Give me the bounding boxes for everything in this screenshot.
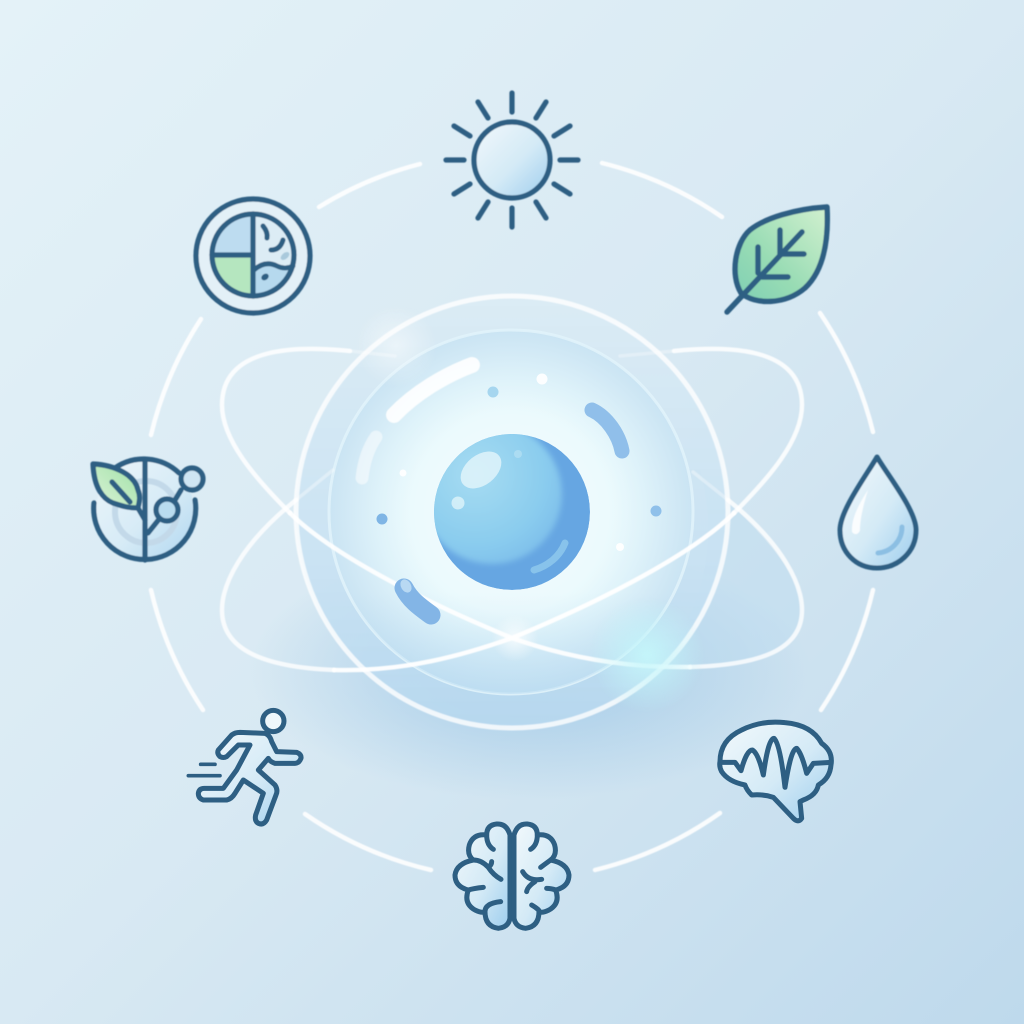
nucleus [434,434,590,590]
icon: sun [446,93,578,227]
icon: brain with wave [720,722,831,821]
organelle: lower left [398,577,431,615]
icon: petri dish [196,199,310,313]
icon: leaf [727,207,827,312]
orbit lines, upper and back [222,349,802,670]
orbit lobe shading [660,470,802,667]
nucleus glow [382,382,642,642]
icon: brain [455,824,569,928]
icon: runner [188,710,301,824]
central cell [222,296,810,800]
orbit lines, front crossing [290,513,734,670]
organelle: upper right [592,410,622,451]
cell shadow [250,540,810,800]
large highlight [394,365,472,415]
glow accents [354,304,705,713]
vesicle dots [376,374,662,551]
icon: plant network [93,459,203,560]
outer segmented ring [151,163,873,870]
icon: water drop [840,457,916,568]
outer membrane [296,296,728,728]
inner cytoplasm sphere [329,330,693,694]
small highlight [362,437,376,478]
